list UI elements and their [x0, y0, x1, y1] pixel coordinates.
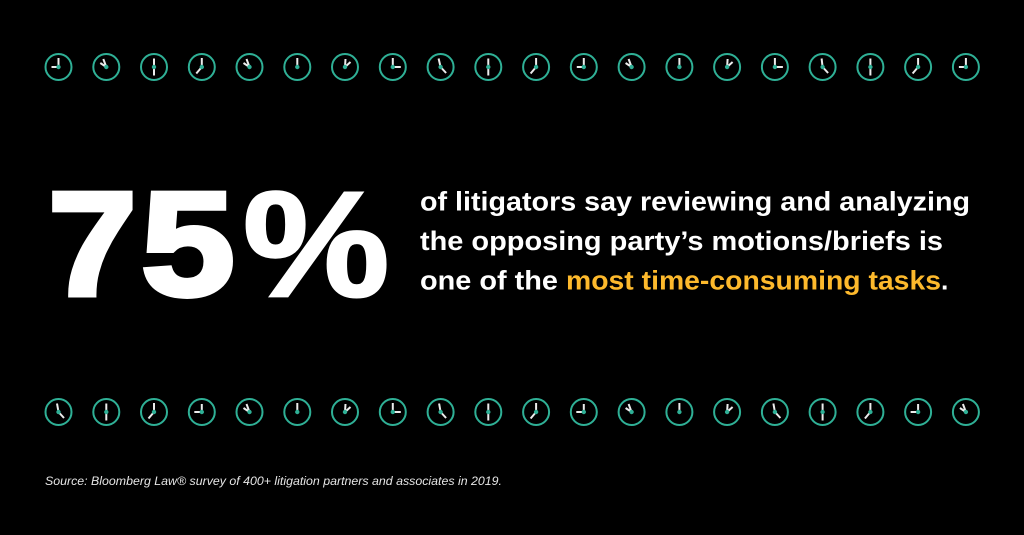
statement text: one of the [420, 266, 558, 296]
big number: 75%: 7 [48, 161, 137, 327]
statement text: most time-consuming tasks [566, 266, 941, 296]
big number: 75%: 5 [141, 161, 235, 327]
source note: Source: Bloomberg Law® survey of 400+ litigation partners and associates in 2019. [45, 476, 502, 488]
clock row: top [46, 54, 979, 80]
clock row: bottom [46, 399, 979, 425]
big number: 75% [48, 161, 389, 328]
big number: 75%: % [243, 161, 389, 328]
statement text [420, 186, 970, 296]
statement text: the opposing party’s motions/briefs is [420, 226, 943, 256]
statement text: of litigators say reviewing and analyzing [420, 186, 970, 216]
statement text: . [941, 266, 948, 296]
